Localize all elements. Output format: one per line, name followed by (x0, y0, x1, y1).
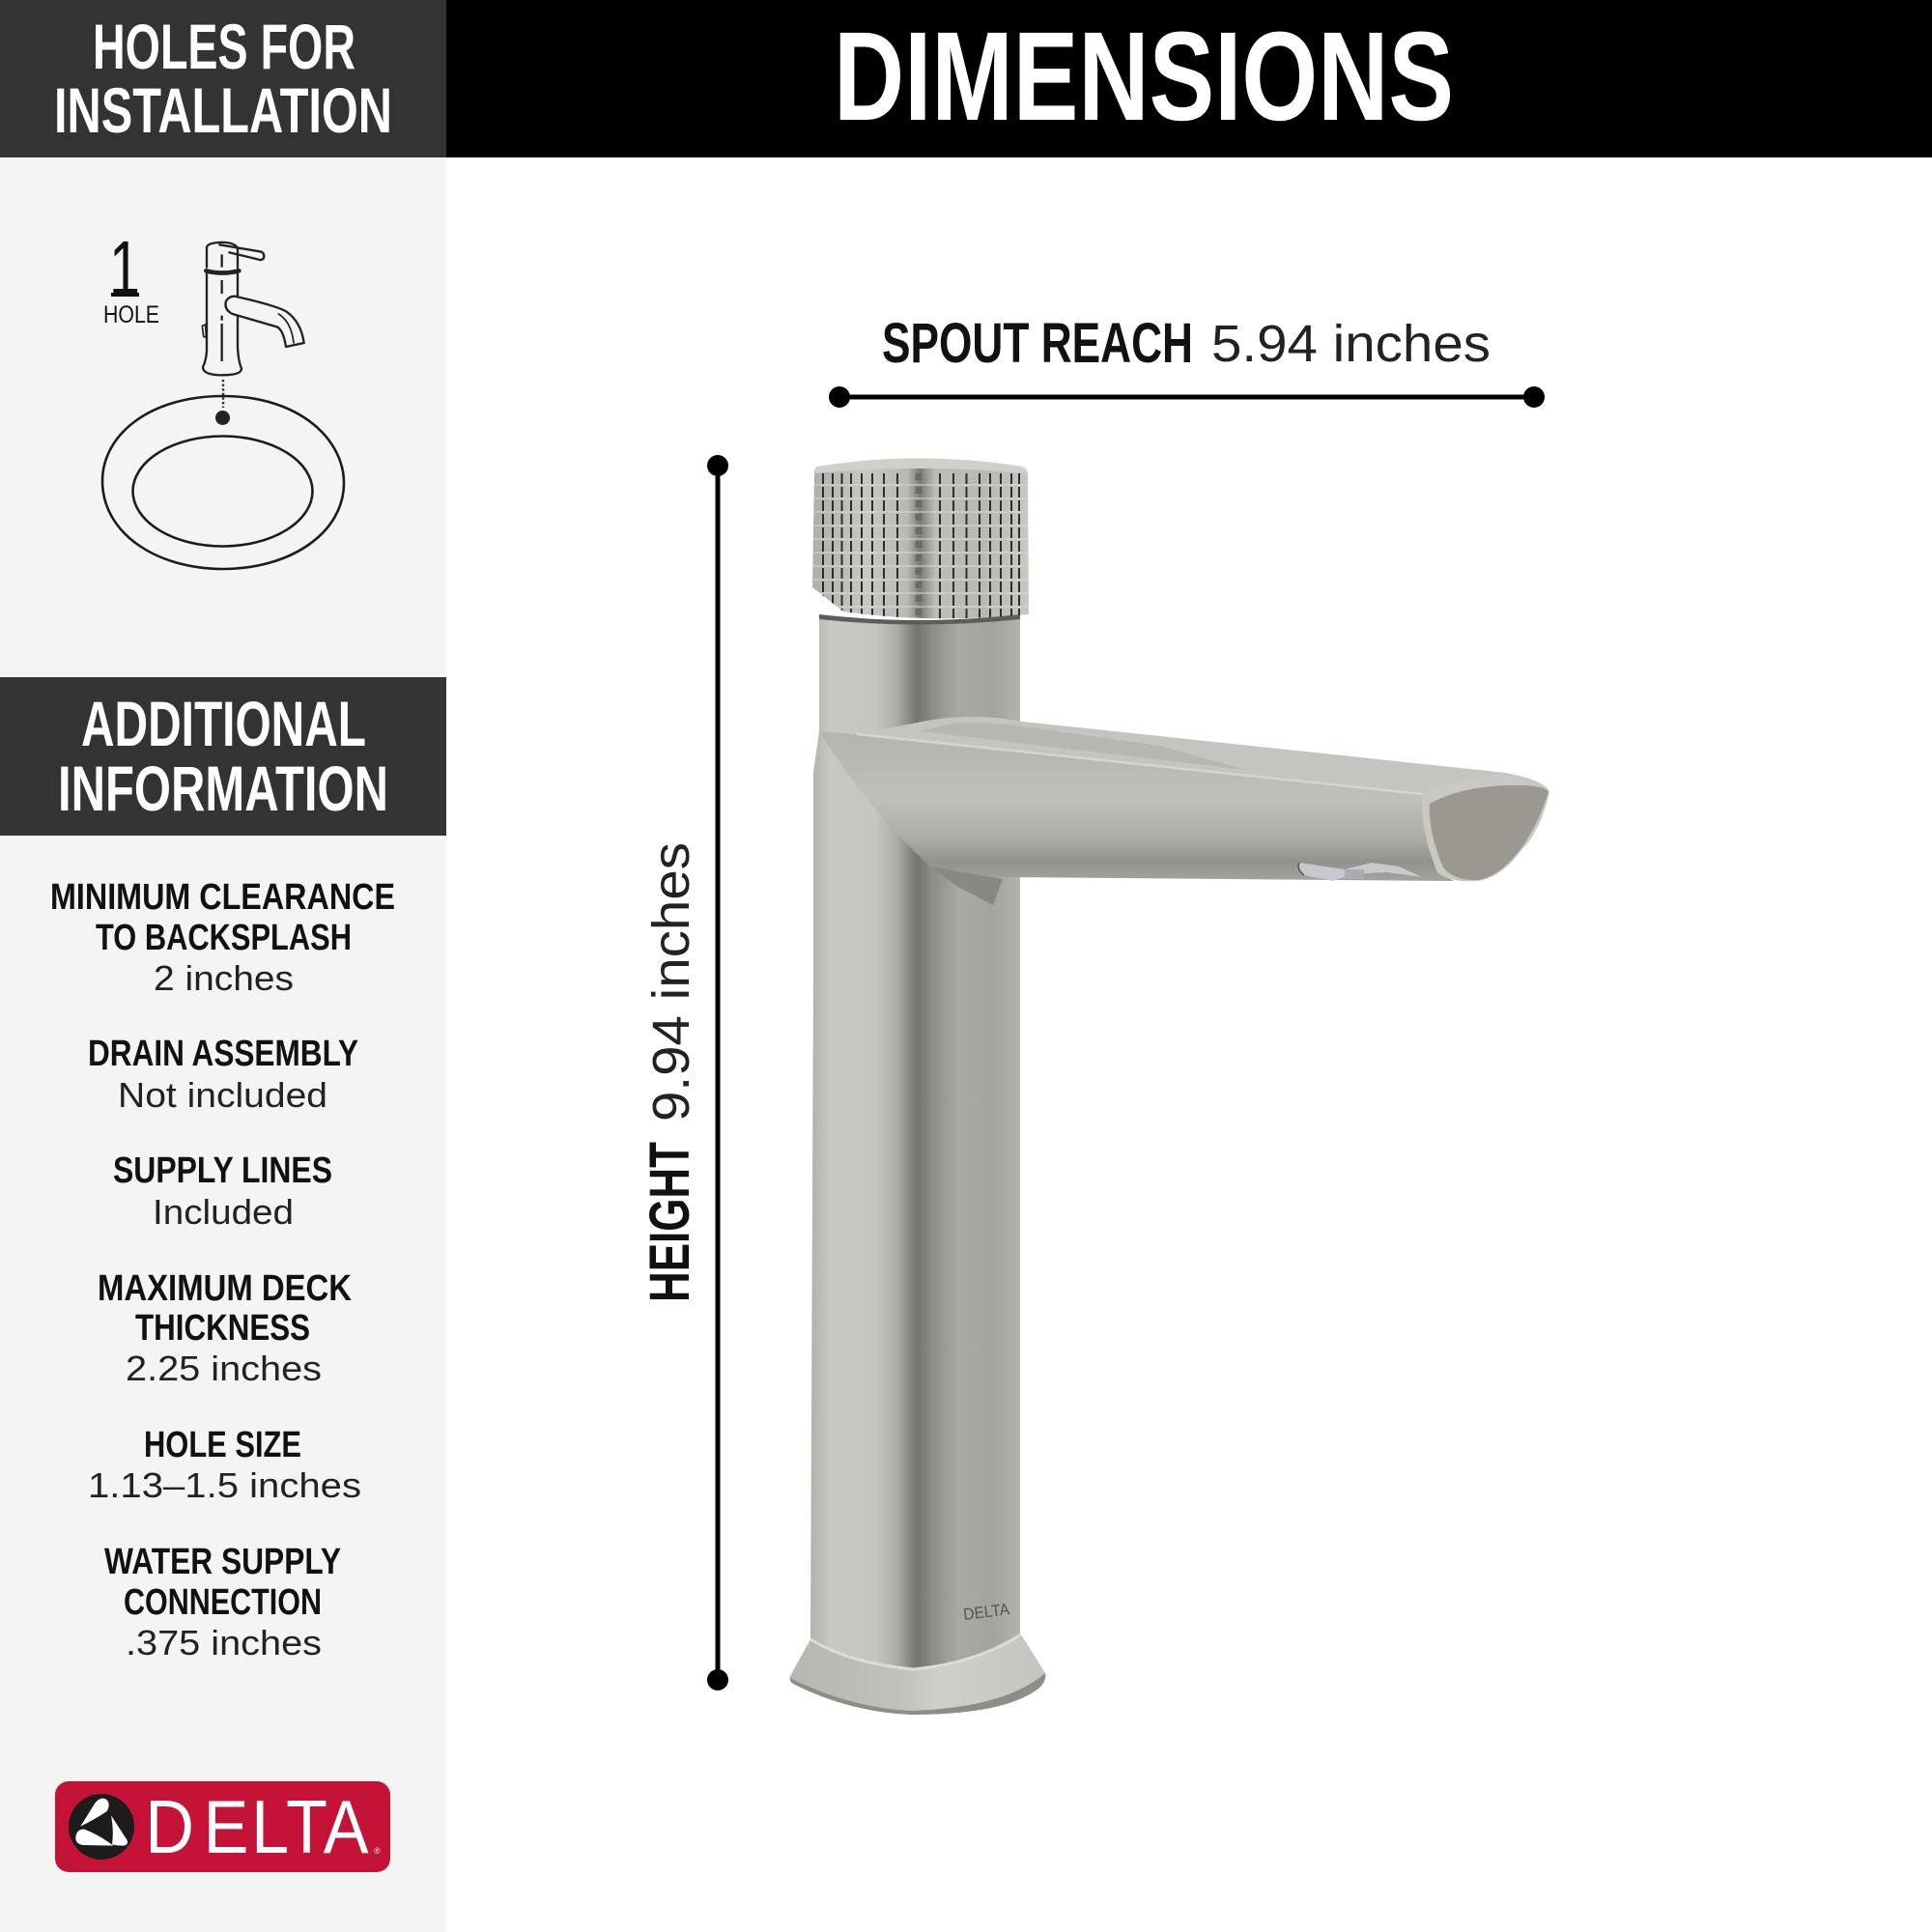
spec: maximum deck thickness (98, 1268, 352, 1388)
dimension: spout reach (829, 312, 1545, 408)
spec: minimum clearance: TO BACKSPLASH (96, 918, 352, 958)
logo: delta (55, 1781, 390, 1872)
faucet column (810, 618, 1020, 1669)
spec: minimum clearance (50, 877, 395, 998)
spec: drain assembly: DRAIN ASSEMBLY (88, 1034, 358, 1074)
logo: delta: ® (374, 1846, 381, 1856)
dimension: height (639, 455, 728, 1690)
spec: hole size: HOLE SIZE (144, 1425, 301, 1465)
dotted alignment line (222, 380, 224, 408)
spout underside collar (930, 867, 1003, 905)
heading: additional information: ADDITIONAL (81, 688, 366, 759)
icon: one hole faucet and sink diagram (102, 225, 344, 569)
icon: small faucet line drawing (202, 242, 304, 375)
spec: drain assembly (88, 1034, 358, 1115)
dimension: spout reach: 5.94 inches (1211, 315, 1491, 373)
spec: drain assembly: Not included (118, 1075, 327, 1115)
spec: supply lines (113, 1151, 332, 1232)
spec: hole size: 1.13–1.5 inches (88, 1465, 361, 1505)
spec: maximum deck thickness: 2.25 inches (126, 1349, 322, 1388)
faucet spout (819, 717, 1549, 905)
sidebar background panel (0, 0, 446, 1932)
aerator (1298, 863, 1422, 881)
spec: maximum deck thickness: MAXIMUM DECK (98, 1268, 352, 1309)
spec: supply lines: Included (153, 1192, 294, 1232)
arrow: height measure line (707, 455, 728, 1690)
heading: holes for installation (0, 0, 446, 157)
logo: delta: DELTA (145, 1785, 369, 1869)
dimension: height: HEIGHT (639, 1142, 701, 1302)
dimension: spout reach: SPOUT REACH (882, 312, 1193, 375)
spec: water supply connection (104, 1542, 341, 1662)
header bar: dimensions title (446, 0, 1932, 157)
spec: minimum clearance: 2 inches (154, 958, 294, 998)
heading: additional information (0, 677, 446, 836)
heading: additional information: INFORMATION (58, 753, 388, 824)
heading: holes for installation: HOLES FOR (93, 11, 355, 82)
panel: additional information list (50, 877, 395, 1662)
spec: supply lines: SUPPLY LINES (113, 1151, 332, 1191)
dimension: height: 9.94 inches (642, 842, 700, 1122)
title: DIMENSIONS (834, 5, 1454, 147)
icon: delta triangle mark (69, 1794, 134, 1860)
spec: maximum deck thickness: THICKNESS (135, 1308, 310, 1349)
heading: holes for installation: INSTALLATION (54, 74, 392, 146)
spec: hole size (88, 1425, 361, 1505)
faucet base (790, 1634, 1045, 1715)
spec: water supply connection: .375 inches (126, 1623, 322, 1662)
icon: sink outline with hole (102, 396, 344, 569)
faucet logo engraving: DELTA (962, 1600, 1011, 1624)
spec: minimum clearance: MINIMUM CLEARANCE (50, 877, 395, 918)
product: faucet (790, 458, 1549, 1715)
arrow: spout reach measure line (829, 386, 1545, 408)
hole count label: HOLE (103, 301, 159, 328)
spec: water supply connection: WATER SUPPLY (104, 1542, 341, 1582)
hole count label (103, 225, 159, 328)
faucet knob (812, 458, 1029, 624)
hole count label: 1 (109, 225, 140, 311)
spec: water supply connection: CONNECTION (124, 1582, 322, 1623)
spout end cap (1422, 773, 1549, 881)
